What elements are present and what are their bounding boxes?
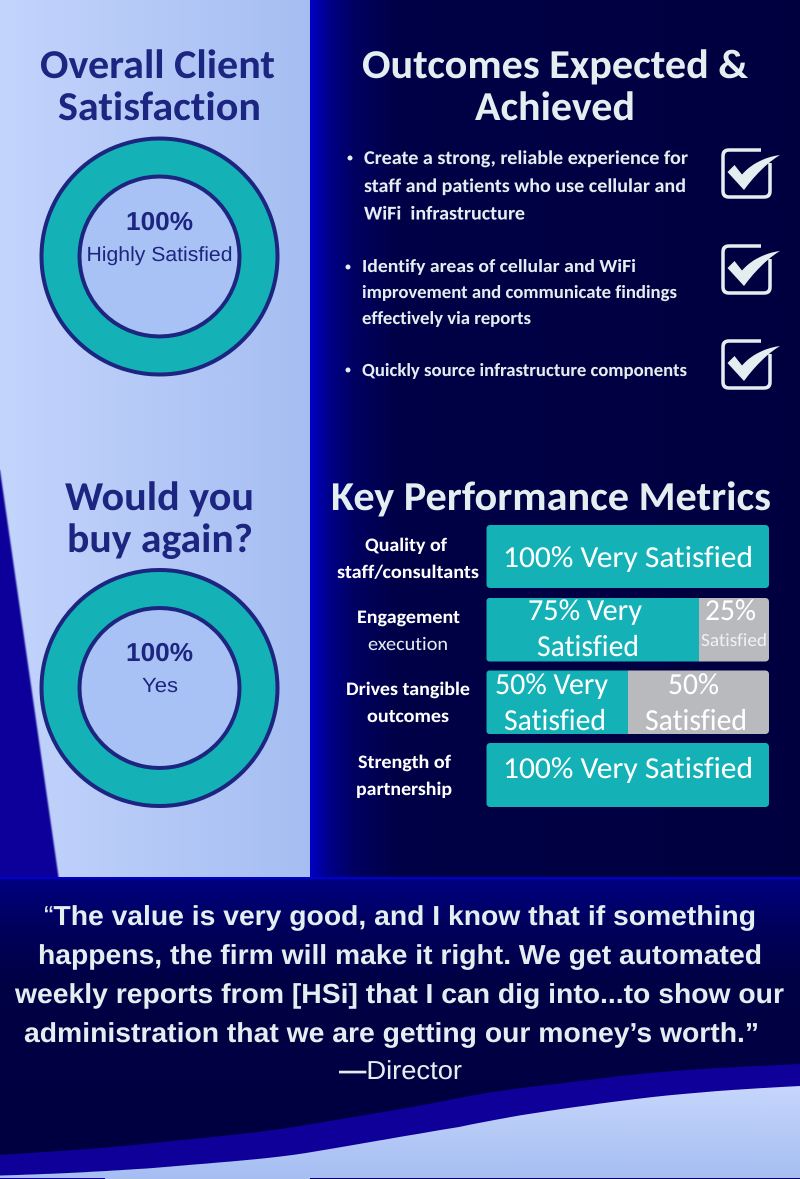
metric row: quality of staff: Quality of	[365, 534, 447, 557]
outcome 2 text	[346, 254, 677, 329]
donut chart: 100% yes	[42, 570, 278, 806]
wave: dark blue band	[0, 1064, 800, 1179]
metric row: drives tangible outcomes	[346, 666, 769, 739]
metric row: drives tangible outcomes: 50% Very	[495, 666, 608, 703]
testimonial quote: happens, the firm will make it right. We get automated	[38, 939, 762, 970]
heading: outcomes expected and achieved: Outcomes Expected &	[362, 40, 749, 90]
bottom edge strip	[0, 1178, 800, 1179]
outcome 1 text: Create a strong, reliable experience for	[364, 146, 688, 170]
outcome 1 text: staff and patients who use cellular and	[364, 174, 686, 198]
metric row: quality of staff: 100% Very Satisfied	[503, 539, 753, 576]
heading: would you buy again: buy again?	[67, 514, 253, 564]
donut chart: 100% highly satisfied: Highly Satisfied	[86, 243, 232, 266]
outcome 1 text	[348, 146, 688, 226]
metric row: quality of staff	[337, 525, 769, 588]
panel: testimonial footer	[0, 877, 800, 1179]
panel: would you buy again	[42, 472, 278, 806]
metric row: engagement execution: 25%	[705, 592, 756, 629]
testimonial quote: administration that we are getting our money’s worth.”	[24, 1017, 759, 1048]
panel: right dark background	[310, 0, 800, 878]
icon: checkbox 2	[723, 246, 780, 293]
metric row: drives tangible outcomes: Satisfied	[645, 702, 747, 739]
outcome 2 text: improvement and communicate findings	[362, 280, 677, 303]
metric row: engagement execution: execution	[368, 633, 448, 656]
metric row: quality of staff: staff/consultants	[337, 561, 479, 584]
metric row: drives tangible outcomes: 50%	[668, 666, 719, 703]
metric row: engagement execution	[357, 592, 769, 665]
metric row: strength of partnership	[356, 743, 769, 807]
metric row: engagement execution: Satisfied	[537, 628, 639, 665]
metric row: engagement execution: Engagement	[357, 606, 460, 629]
icon: checkbox 1	[723, 150, 780, 197]
heading: key performance metrics: Key Performance Metrics	[331, 472, 771, 522]
metric row: drives tangible outcomes: Satisfied	[504, 702, 606, 739]
metric row: drives tangible outcomes: outcomes	[367, 705, 449, 728]
donut chart: 100% highly satisfied	[42, 138, 278, 374]
heading: overall client satisfaction: Overall Client	[40, 40, 275, 90]
metric row: engagement execution: 75% Very	[528, 592, 642, 629]
heading: would you buy again: Would you	[65, 472, 254, 522]
donut chart: 100% yes: 100%	[126, 637, 193, 667]
metric row: strength of partnership: partnership	[356, 778, 452, 801]
wave: light band	[0, 1086, 800, 1179]
outcome 2 text: Identify areas of cellular and WiFi	[362, 254, 636, 277]
decorative wedge: left edge	[0, 470, 59, 880]
metric row: drives tangible outcomes: Drives tangible	[346, 678, 470, 701]
quote attribution: —Director	[339, 1055, 462, 1085]
outcome 3 text: Quickly source infrastructure components	[362, 358, 687, 381]
metric row: strength of partnership: 100% Very Satisfied	[503, 750, 753, 787]
panel: overall client satisfaction	[40, 40, 278, 374]
outcome 1 text: WiFi infrastructure	[364, 202, 525, 226]
testimonial quote: “The value is very good, and I know that if something	[44, 900, 736, 931]
panel: left light background	[0, 0, 310, 878]
outcome 2 text: effectively via reports	[362, 306, 531, 329]
metric row: engagement execution: Satisfied	[701, 628, 767, 651]
testimonial quote: weekly reports from [HSi] that I can dig into...to show our	[14, 978, 784, 1009]
heading: overall client satisfaction: Satisfaction	[58, 82, 261, 132]
donut chart: 100% highly satisfied: 100%	[126, 206, 193, 236]
donut chart: 100% yes: Yes	[142, 674, 178, 697]
panel: outcomes expected and achieved	[346, 40, 780, 388]
icon: checkbox 3	[723, 341, 780, 388]
heading: outcomes expected and achieved: Achieved	[475, 82, 635, 132]
panel: key performance metrics	[331, 472, 771, 807]
metric row: strength of partnership: Strength of	[358, 751, 451, 774]
